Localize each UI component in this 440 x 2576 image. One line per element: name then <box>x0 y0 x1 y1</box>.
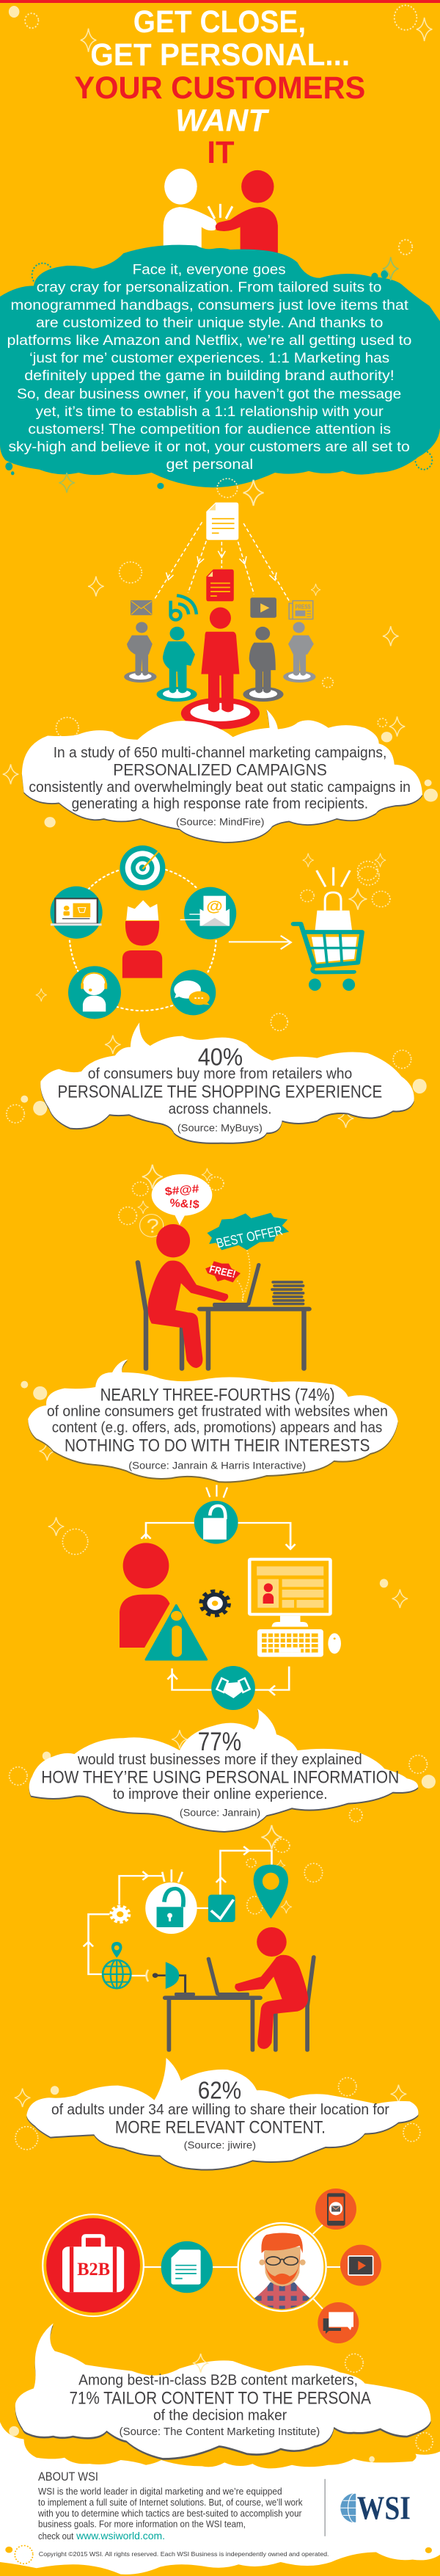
logo: WSI: WSI <box>357 2489 411 2527</box>
text: 62 percent stat: MORE RELEVANT CONTENT. <box>115 2118 326 2137</box>
text: campaigns stat: In a study of 650 multi-channel marketing campaigns, <box>54 745 386 761</box>
text: 74 percent stat <box>47 1386 388 1471</box>
connector lines <box>144 2265 238 2269</box>
icon: blog <box>171 595 197 620</box>
text: 71 percent stat <box>70 2371 372 2438</box>
icon: computer profile <box>248 1558 341 1657</box>
heading: about WSI: ABOUT WSI <box>38 2470 98 2484</box>
icon: question mark: ? <box>147 1215 159 1237</box>
text: 74 percent stat: (Source: Janrain & Harris Interactive) <box>128 1460 306 1471</box>
icon: press newspaper: PRESS <box>296 603 311 610</box>
text: about paragraph: WSI is the world leader in digital marketing and we’re equipped <box>38 2486 282 2497</box>
text: 77 percent stat <box>41 1727 399 1819</box>
figure: teal person <box>157 627 197 702</box>
text: 40 percent stat <box>57 1044 382 1134</box>
icon: chat <box>170 969 216 1015</box>
icon: handshake <box>211 1666 255 1710</box>
figure: frustrated person at desk <box>138 1224 312 1369</box>
arrows: document to channels <box>154 522 289 601</box>
text: 71 percent stat: (Source: The Content Marketing Institute) <box>120 2426 320 2438</box>
badge: best offer: BEST OFFER <box>215 1223 285 1251</box>
figure: light gray person right <box>283 622 316 683</box>
icon: handshake people <box>164 169 278 256</box>
text: 74 percent stat: NEARLY THREE-FOURTHS (74%) <box>100 1386 335 1405</box>
icon: red document <box>206 570 234 601</box>
icon: document <box>161 2241 213 2293</box>
badge: free: FREE! <box>208 1264 237 1281</box>
title <box>74 4 365 170</box>
text: intro paragraph <box>7 262 411 473</box>
icon: email <box>180 887 236 939</box>
figure: gray person left <box>124 622 157 683</box>
icon: globe with pin <box>103 1942 131 1988</box>
text: about paragraph <box>37 2486 303 2542</box>
panel: 40% callout cloud <box>40 1022 414 1144</box>
figure: crowned customer <box>122 900 162 978</box>
text: 40 percent stat: of consumers buy more from retailers who <box>88 1066 352 1082</box>
text: 77 percent stat: to improve their online experience. <box>113 1786 328 1802</box>
badge: best offer <box>207 1213 289 1251</box>
text: intro paragraph: get personal <box>166 456 253 473</box>
dotted lines from ads to laptop <box>237 1250 250 1301</box>
icon: B2B briefcase <box>43 2214 144 2316</box>
icon: laptop shop <box>51 887 103 939</box>
icon: question mark <box>140 1215 164 1237</box>
figure: red central person <box>181 607 260 729</box>
text: 71 percent stat: of the decision maker <box>153 2407 287 2423</box>
text: 77 percent stat: (Source: Janrain) <box>180 1808 260 1819</box>
icon: email: @ <box>206 898 223 914</box>
text: intro paragraph: monogrammed handbags, consumers just love items that <box>11 297 409 313</box>
panel: 71% callout cloud <box>15 2324 430 2460</box>
title: YOUR CUSTOMERS <box>74 70 365 105</box>
arrow: to cart <box>229 936 291 949</box>
icon: video <box>340 2245 381 2286</box>
text: 40 percent stat: (Source: MyBuys) <box>177 1123 263 1134</box>
icon: open lock <box>194 1501 238 1544</box>
icon: gear <box>201 1591 229 1615</box>
text: intro paragraph: definitely upped the game in building brand authority! <box>24 368 395 384</box>
text: about paragraph: to implement a full suite of Internet solutions. But, of course, we’ll work <box>38 2497 303 2508</box>
title: GET PERSONAL... <box>90 37 350 73</box>
text: intro paragraph: customers! The competition for audience attention is <box>28 421 391 437</box>
divider <box>324 2479 326 2536</box>
text: about paragraph: business goals. For more information on the WSI team, <box>38 2519 246 2529</box>
text: intro paragraph: sky-high and believe it or not, your customers are all set to <box>8 439 410 455</box>
icon: target <box>120 845 165 890</box>
panel: 77% callout cloud <box>29 1709 418 1833</box>
icon: email envelope <box>131 600 152 615</box>
connector lines to channels <box>313 2225 340 2309</box>
icon: master document <box>206 503 238 540</box>
text: 62 percent stat: (Source: jiwire) <box>184 2139 256 2151</box>
top red bar <box>0 0 440 3</box>
text: 74 percent stat: of online consumers get frustrated with websites when <box>47 1403 388 1419</box>
icon: satellite dish <box>147 1962 195 1996</box>
text: intro paragraph: platforms like Amazon and Netflix, we’re all getting used to <box>7 332 411 349</box>
dotted ring connecting channels <box>70 870 216 1011</box>
figure: person at desk with laptop <box>163 1927 314 2050</box>
text: 62 percent stat <box>51 2077 389 2151</box>
icon: B2B briefcase: B2B <box>77 2259 110 2280</box>
speech bubble: swearing: %&!$ <box>169 1197 199 1211</box>
icon: white gear <box>111 1907 129 1922</box>
title: GET CLOSE, <box>133 4 306 40</box>
icon: phone <box>315 2188 356 2230</box>
icon: map pin <box>254 1865 288 1918</box>
icon: open lock <box>145 1882 197 1934</box>
text: intro paragraph: are customized to their unique style. And thanks to <box>36 315 383 331</box>
icon: comment bubbles <box>318 2302 359 2343</box>
text: campaigns stat: PERSONALIZED CAMPAIGNS <box>113 761 327 779</box>
panel: footer about WSI <box>0 2422 440 2575</box>
icon: video player <box>250 597 276 618</box>
icon: shopping cart with bag <box>293 867 362 991</box>
text: intro paragraph: So, dear business owner, if you haven’t got the message <box>17 386 401 402</box>
speech bubble: swearing: $#@# <box>164 1183 199 1198</box>
text: 62 percent stat: 62% <box>198 2077 241 2104</box>
text: campaigns stat <box>29 745 411 828</box>
text: about paragraph: www.wsiworld.com. <box>76 2530 165 2542</box>
text: 40 percent stat: across channels. <box>169 1101 271 1117</box>
text: intro paragraph: ‘just for me’ customer experiences. 1:1 Marketing has <box>29 350 389 366</box>
icon: check <box>208 1895 235 1922</box>
text: campaigns stat: (Source: MindFire) <box>176 817 265 828</box>
arrows: location flow <box>84 1847 271 1976</box>
text: campaigns stat: generating a high response rate from recipients. <box>72 796 368 812</box>
panel: 62% callout cloud <box>26 2058 418 2171</box>
logo: WSI <box>340 2489 411 2527</box>
text: intro paragraph: cray cray for personalization. From tailored suits to <box>37 280 381 296</box>
text: intro paragraph: Face it, everyone goes <box>133 262 286 278</box>
title: IT <box>207 134 235 170</box>
icon: support agent <box>68 966 121 1019</box>
panel: personalized campaigns callout cloud <box>22 710 422 843</box>
speech bubble: swearing <box>152 1174 212 1225</box>
rays above lock <box>206 1485 227 1498</box>
text: about paragraph: with you to determine which tactics are best-suited to accomplish your <box>37 2508 302 2519</box>
text: intro paragraph: yet, it’s time to establish a 1:1 relationship with your <box>36 404 384 420</box>
text: about paragraph: check out <box>38 2531 73 2542</box>
figure: persona portrait <box>238 2223 326 2311</box>
text: 40 percent stat: 40% <box>198 1044 243 1071</box>
text: copyright: Copyright ©2015 WSI. All rights reserved. Each WSI Business is independently owned and operated. <box>39 2551 329 2558</box>
figure: dark gray person <box>243 627 284 702</box>
icon: press newspaper <box>289 601 313 619</box>
figure: person with info triangle <box>120 1543 207 1659</box>
text: 71 percent stat: Among best-in-class B2B content marketers, <box>78 2371 358 2388</box>
text: 77 percent stat: would trust businesses more if they explained <box>77 1751 362 1768</box>
text: 77 percent stat: 77% <box>198 1727 241 1755</box>
panel: intro teal cloud <box>0 245 440 487</box>
panel: frustrated consumers callout cloud <box>28 1359 398 1483</box>
arrows: trust cycle <box>141 1523 296 1695</box>
title: WANT <box>175 103 269 138</box>
